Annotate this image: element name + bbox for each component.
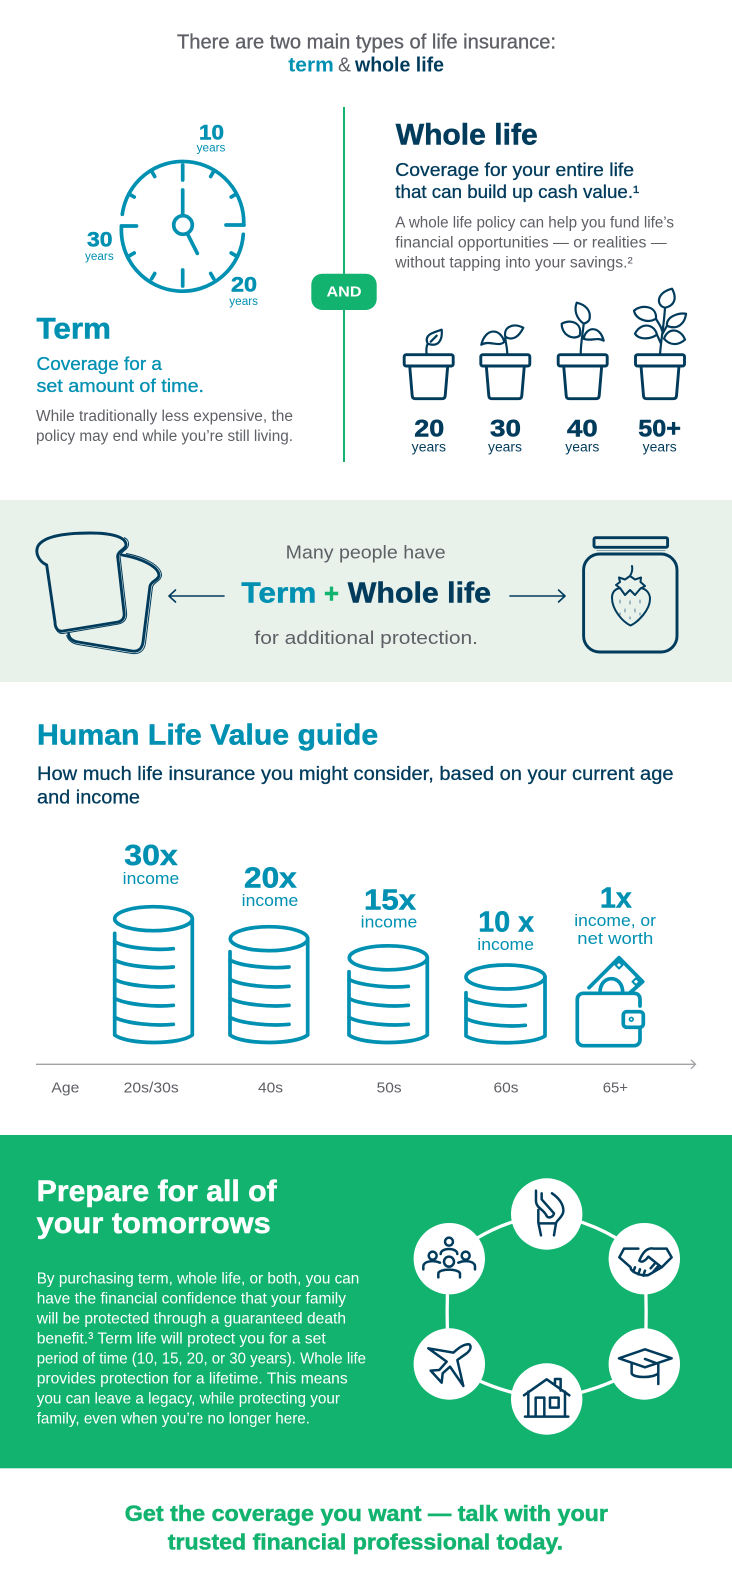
icon: sprout pot, 30 years xyxy=(481,326,530,399)
panel: human life value guide xyxy=(36,719,696,1096)
prepare body text: period of time (10, 15, 20, or 30 years). Whole life xyxy=(37,1350,366,1367)
guide subheading xyxy=(37,764,674,808)
title xyxy=(177,31,556,77)
panel: term xyxy=(36,120,293,445)
arrow: right xyxy=(510,590,565,602)
prepare body text: provides protection for a lifetime. This means xyxy=(37,1370,348,1387)
pot label: 30 years xyxy=(488,416,522,455)
icon: coin stack, 15x xyxy=(349,946,427,1042)
label: 10x income xyxy=(477,907,534,954)
icon: coin stack, 20x xyxy=(230,927,308,1042)
label: 1x income or net worth xyxy=(574,883,657,948)
clock label: 20 years: years xyxy=(229,296,258,308)
pot label: 30 years: 30 xyxy=(490,416,521,443)
divider: green line with AND badge: AND xyxy=(326,284,362,301)
prepare body text: benefit.³ Term life will protect you for a set xyxy=(37,1330,326,1347)
whole life description xyxy=(394,214,674,271)
term subheading: set amount of time. xyxy=(36,376,204,396)
label: 1x income or net worth: net worth xyxy=(577,930,653,948)
title: whole life xyxy=(354,55,444,77)
term subheading xyxy=(36,354,204,396)
guide subheading: and income xyxy=(37,787,140,808)
band text: Many people have xyxy=(286,542,446,562)
panel: term plus whole life band xyxy=(0,500,732,682)
label: 30x income: income xyxy=(123,870,179,888)
label: 1x income or net worth: 1x xyxy=(600,883,632,915)
whole life subheading xyxy=(395,160,639,202)
label: 20x income xyxy=(242,863,298,910)
arrow: left xyxy=(169,590,224,602)
clock label: 30 years: 30 xyxy=(87,228,113,252)
panel: prepare for all of your tomorrows xyxy=(0,1135,732,1468)
label: 10x income: 10 x xyxy=(478,907,534,939)
band text xyxy=(241,542,491,648)
guide subheading: How much life insurance you might consider, based on your current age xyxy=(37,764,674,785)
whole life description: without tapping into your savings.² xyxy=(394,254,633,271)
icon: short coin stack, 10x xyxy=(466,965,545,1043)
closing call to action: Get the coverage you want — talk with your xyxy=(125,1501,608,1526)
pot label: 20 years: 20 xyxy=(414,416,444,443)
icon: handshake xyxy=(619,1248,672,1276)
title: term xyxy=(288,55,334,77)
clock label: 30 years: years xyxy=(85,251,114,263)
prepare body text: will be protected through a guaranteed death xyxy=(36,1310,346,1327)
prepare body text xyxy=(36,1270,366,1427)
icon: bread slices xyxy=(37,533,162,654)
heading: prepare for all of your tomorrows: your tomorrows xyxy=(37,1207,271,1240)
heading: prepare for all of your tomorrows xyxy=(37,1175,278,1240)
heading: term: Term xyxy=(36,313,111,346)
axis labels: 50s xyxy=(377,1079,402,1096)
title: & xyxy=(338,55,352,77)
label: 20x income: 20x xyxy=(244,863,297,895)
term description: While traditionally less expensive, the xyxy=(36,408,293,425)
label: 15x income: 15x xyxy=(364,884,416,916)
icon: family group xyxy=(423,1238,475,1277)
heading: human life value guide: Human Life Value guide xyxy=(37,719,378,751)
label: 15x income: income xyxy=(361,913,417,931)
pot label: 20 years xyxy=(412,416,446,455)
label: 30x income: 30x xyxy=(124,840,178,872)
pot label: 20 years: years xyxy=(412,440,446,455)
band text: for additional protection. xyxy=(254,628,478,648)
divider: green line with AND badge xyxy=(311,107,377,462)
axis labels: 20s/30s xyxy=(124,1079,179,1096)
closing call to action xyxy=(125,1501,608,1554)
pot label: 50+ years: years xyxy=(643,440,677,455)
clock label: 20 years: 20 xyxy=(231,273,257,297)
clock label: 10 years xyxy=(197,120,226,155)
icon: airplane xyxy=(428,1344,471,1386)
whole life description: financial opportunities — or realities — xyxy=(395,234,667,251)
panel: whole life xyxy=(394,118,686,455)
pot label: 50+ years: 50+ xyxy=(638,416,681,443)
label: 30x income xyxy=(123,840,179,888)
icon: tall coin stack, 30x xyxy=(115,907,192,1042)
band text: Whole life xyxy=(348,577,491,609)
icon: clock xyxy=(121,161,244,291)
pot label: 40 years: years xyxy=(565,440,600,455)
pot label: 40 years: 40 xyxy=(567,416,598,443)
clock label: 10 years: 10 xyxy=(199,120,224,144)
prepare body text: family, even when you’re no longer here. xyxy=(37,1410,310,1427)
label: 10x income: income xyxy=(477,936,534,954)
icon: wallet xyxy=(577,958,643,1046)
term subheading: Coverage for a xyxy=(36,354,163,374)
pot label: 40 years xyxy=(565,416,600,455)
icon: hands on belly xyxy=(536,1191,563,1235)
icon: graduation cap xyxy=(619,1349,672,1384)
band text: + xyxy=(324,578,339,608)
pot label: 30 years: years xyxy=(488,440,522,455)
label: 15x income xyxy=(361,884,417,931)
ring of life-goal icons xyxy=(414,1178,680,1435)
pot label: 50+ years xyxy=(638,416,681,455)
term description xyxy=(36,408,293,445)
label: 20x income: income xyxy=(242,892,298,910)
icon: young plant pot, 40 years xyxy=(558,303,607,399)
clock label: 30 years xyxy=(85,228,114,263)
label: 1x income or net worth: income, or xyxy=(574,912,657,930)
axis labels xyxy=(51,1079,628,1096)
whole life description: A whole life policy can help you fund life’s xyxy=(395,214,674,231)
heading: prepare for all of your tomorrows: Prepare for all of xyxy=(37,1175,278,1208)
band text: Term xyxy=(241,577,316,609)
icon: grown plant pot, 50+ years xyxy=(634,289,686,399)
axis labels: 40s xyxy=(258,1079,283,1096)
icon: house xyxy=(524,1379,569,1417)
axis labels: 60s xyxy=(494,1079,518,1096)
icon: strawberry jar xyxy=(584,538,677,652)
heading: whole life: Whole life xyxy=(396,118,538,151)
prepare body text: you can leave a legacy, while protecting your xyxy=(37,1390,341,1407)
prepare body text: By purchasing term, whole life, or both, you can xyxy=(37,1270,359,1287)
whole life subheading: that can build up cash value.¹ xyxy=(395,182,639,202)
age axis xyxy=(36,1060,696,1069)
closing call to action: trusted financial professional today. xyxy=(168,1529,563,1554)
whole life subheading: Coverage for your entire life xyxy=(395,160,634,180)
axis labels: Age xyxy=(51,1079,79,1096)
clock label: 10 years: years xyxy=(197,143,226,155)
title: There are two main types of life insurance: xyxy=(177,31,556,53)
clock label: 20 years xyxy=(229,273,258,308)
axis labels: 65+ xyxy=(603,1079,628,1096)
icon: seedling pot, 20 years xyxy=(404,330,453,399)
prepare body text: have the financial confidence that your family xyxy=(37,1290,346,1307)
term description: policy may end while you’re still living. xyxy=(36,428,293,445)
